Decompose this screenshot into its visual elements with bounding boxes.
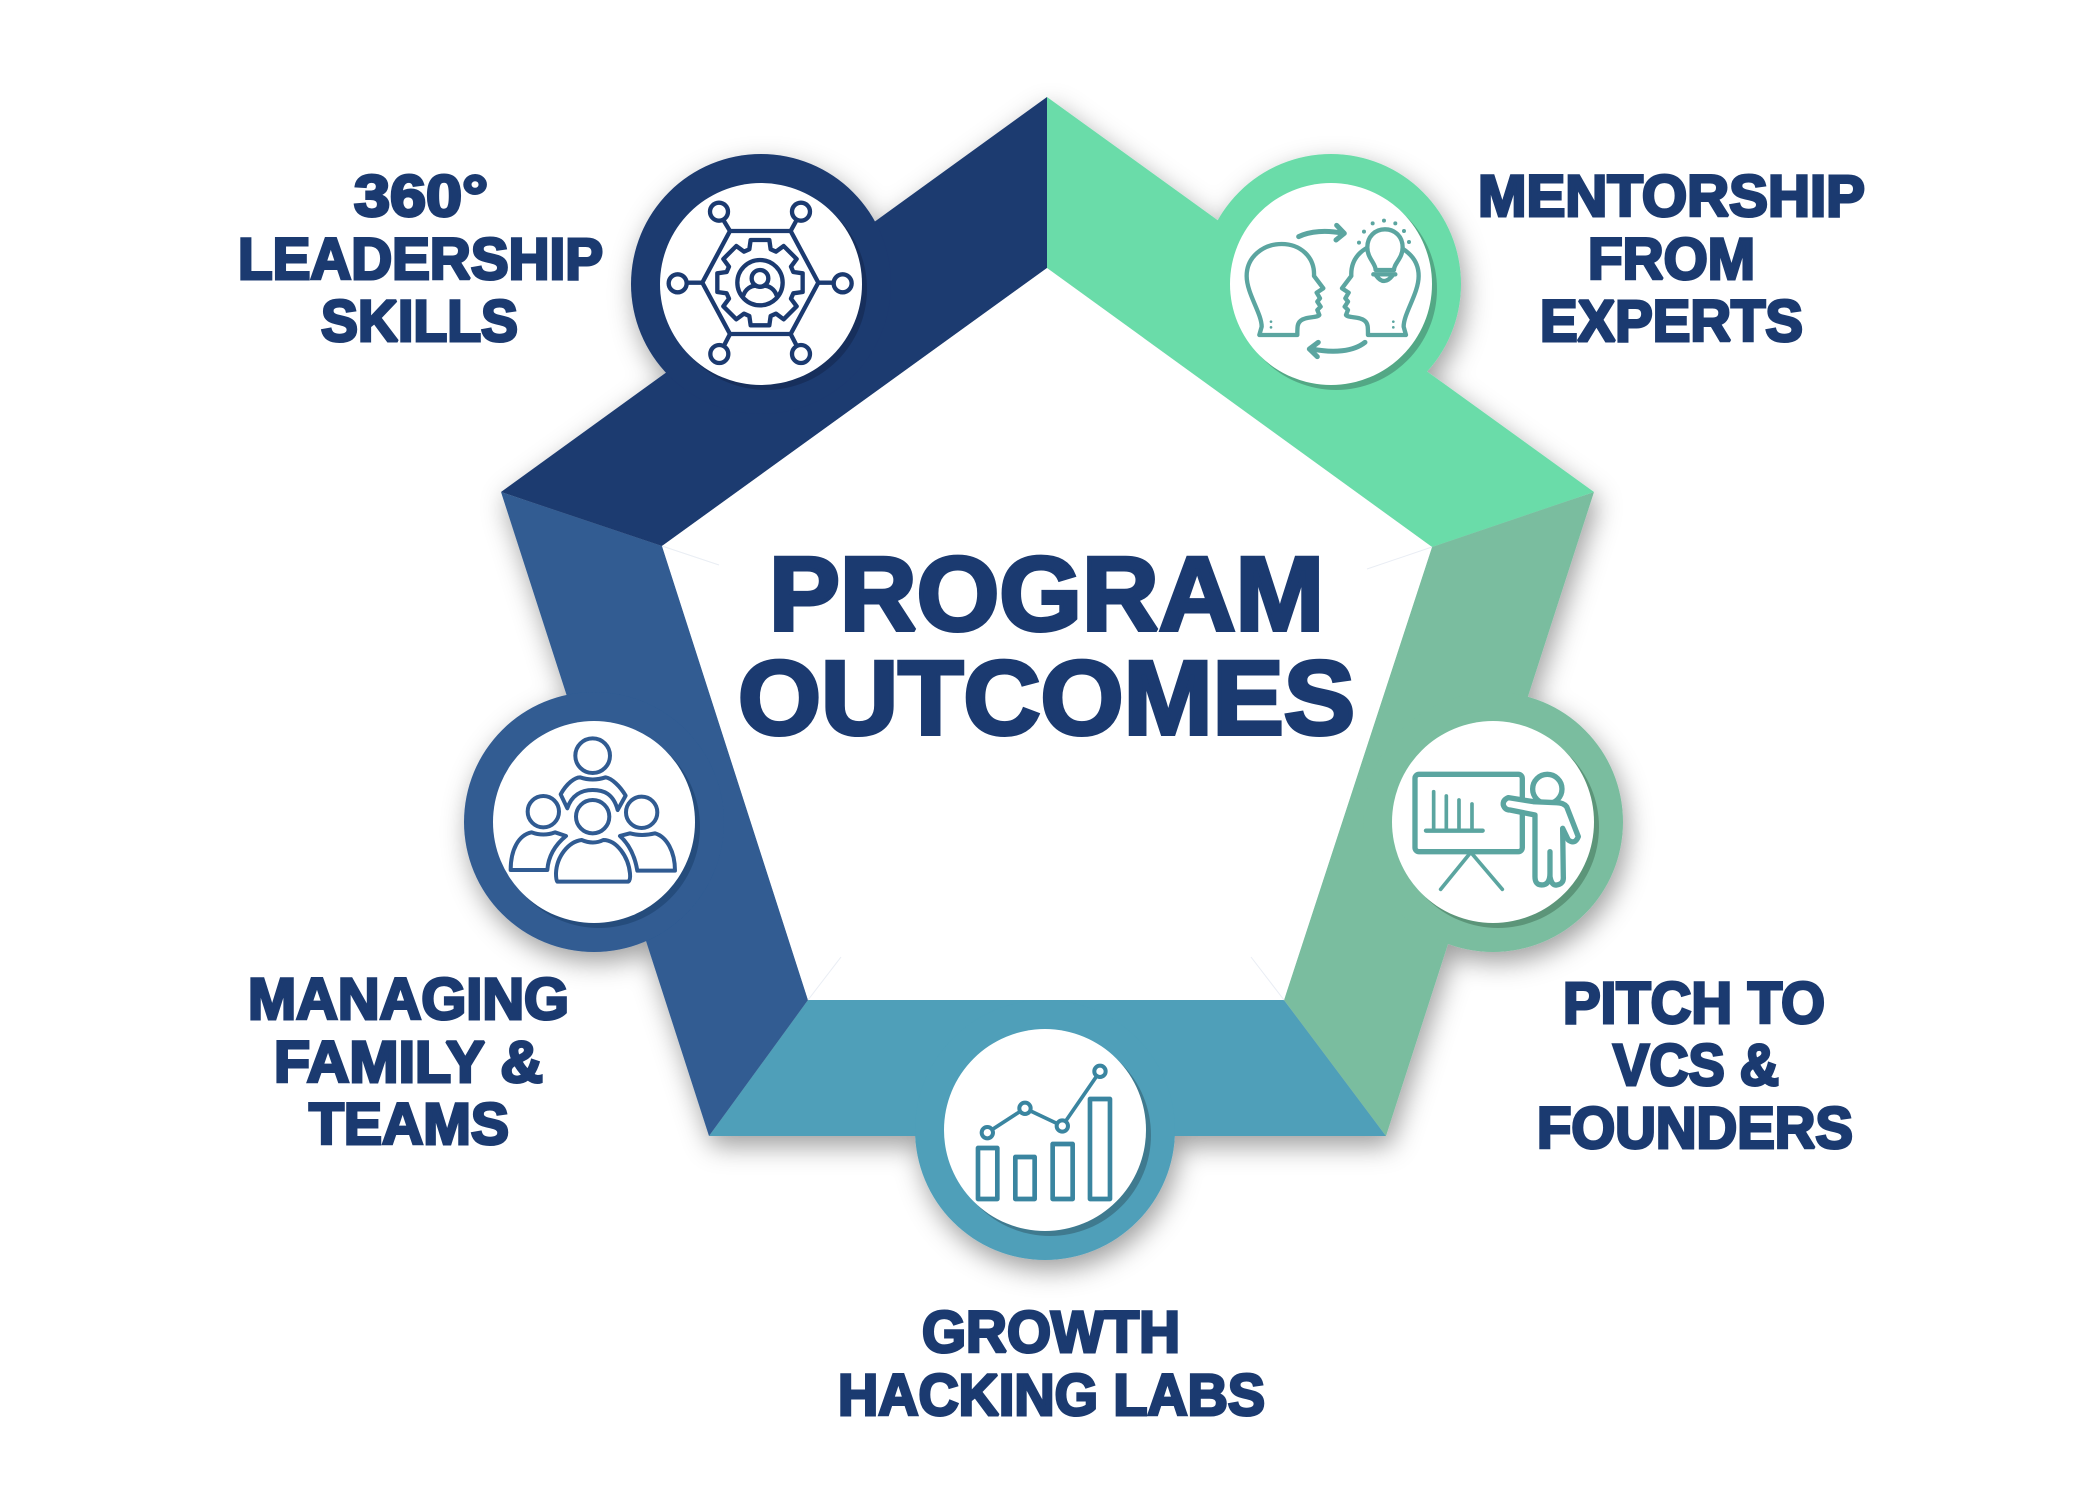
label: 360 leadership skills: SKILLS xyxy=(321,289,518,354)
badge: mentorship icon disc xyxy=(1230,183,1437,390)
segment: top right green xyxy=(1047,97,1594,547)
badge: team icon disc xyxy=(493,721,700,928)
label: mentorship from experts: FROM xyxy=(1588,227,1755,292)
label: pitch to VCs and founders: FOUNDERS xyxy=(1537,1096,1853,1161)
label: 360 leadership skills: 360° xyxy=(354,164,488,229)
badge: growth icon disc xyxy=(944,1029,1151,1236)
label: managing family and teams xyxy=(248,967,569,1157)
label: mentorship from experts: MENTORSHIP xyxy=(1478,164,1865,229)
inner white pentagon xyxy=(662,268,1432,1000)
label: managing family and teams: TEAMS xyxy=(309,1092,509,1157)
label: pitch to VCs and founders: PITCH TO xyxy=(1563,971,1825,1036)
label: pitch to VCs and founders xyxy=(1537,971,1853,1161)
badge: leadership icon disc xyxy=(660,183,867,390)
icon: two heads with lightbulb xyxy=(1247,219,1419,357)
label: growth hacking labs xyxy=(838,1300,1265,1428)
title: PROGRAM xyxy=(769,536,1324,653)
label: managing family and teams: MANAGING xyxy=(248,967,569,1032)
label: mentorship from experts: EXPERTS xyxy=(1540,289,1803,354)
label: pitch to VCs and founders: VCS & xyxy=(1613,1033,1779,1098)
segment: right sage xyxy=(1284,492,1623,1136)
title xyxy=(738,536,1355,757)
title: OUTCOMES xyxy=(738,640,1355,757)
icon: bar chart with trend line xyxy=(978,1066,1110,1199)
segment: left blue xyxy=(464,492,808,1136)
label: mentorship from experts xyxy=(1478,164,1865,354)
badge: pitch icon disc xyxy=(1392,721,1599,928)
label: managing family and teams: FAMILY & xyxy=(274,1030,543,1095)
segment: bottom teal xyxy=(709,1000,1386,1260)
label: growth hacking labs: GROWTH xyxy=(922,1300,1180,1365)
label: growth hacking labs: HACKING LABS xyxy=(838,1363,1265,1428)
label: 360 leadership skills: LEADERSHIP xyxy=(238,227,603,292)
panel: pentagon ring with badges xyxy=(464,97,1623,1260)
segment: top left navy xyxy=(501,97,1047,546)
icon: group of people xyxy=(511,738,675,882)
icon: presenter at board xyxy=(1415,774,1578,889)
icon: gear in hexagon network xyxy=(669,203,852,363)
label: 360 leadership skills xyxy=(238,164,603,354)
